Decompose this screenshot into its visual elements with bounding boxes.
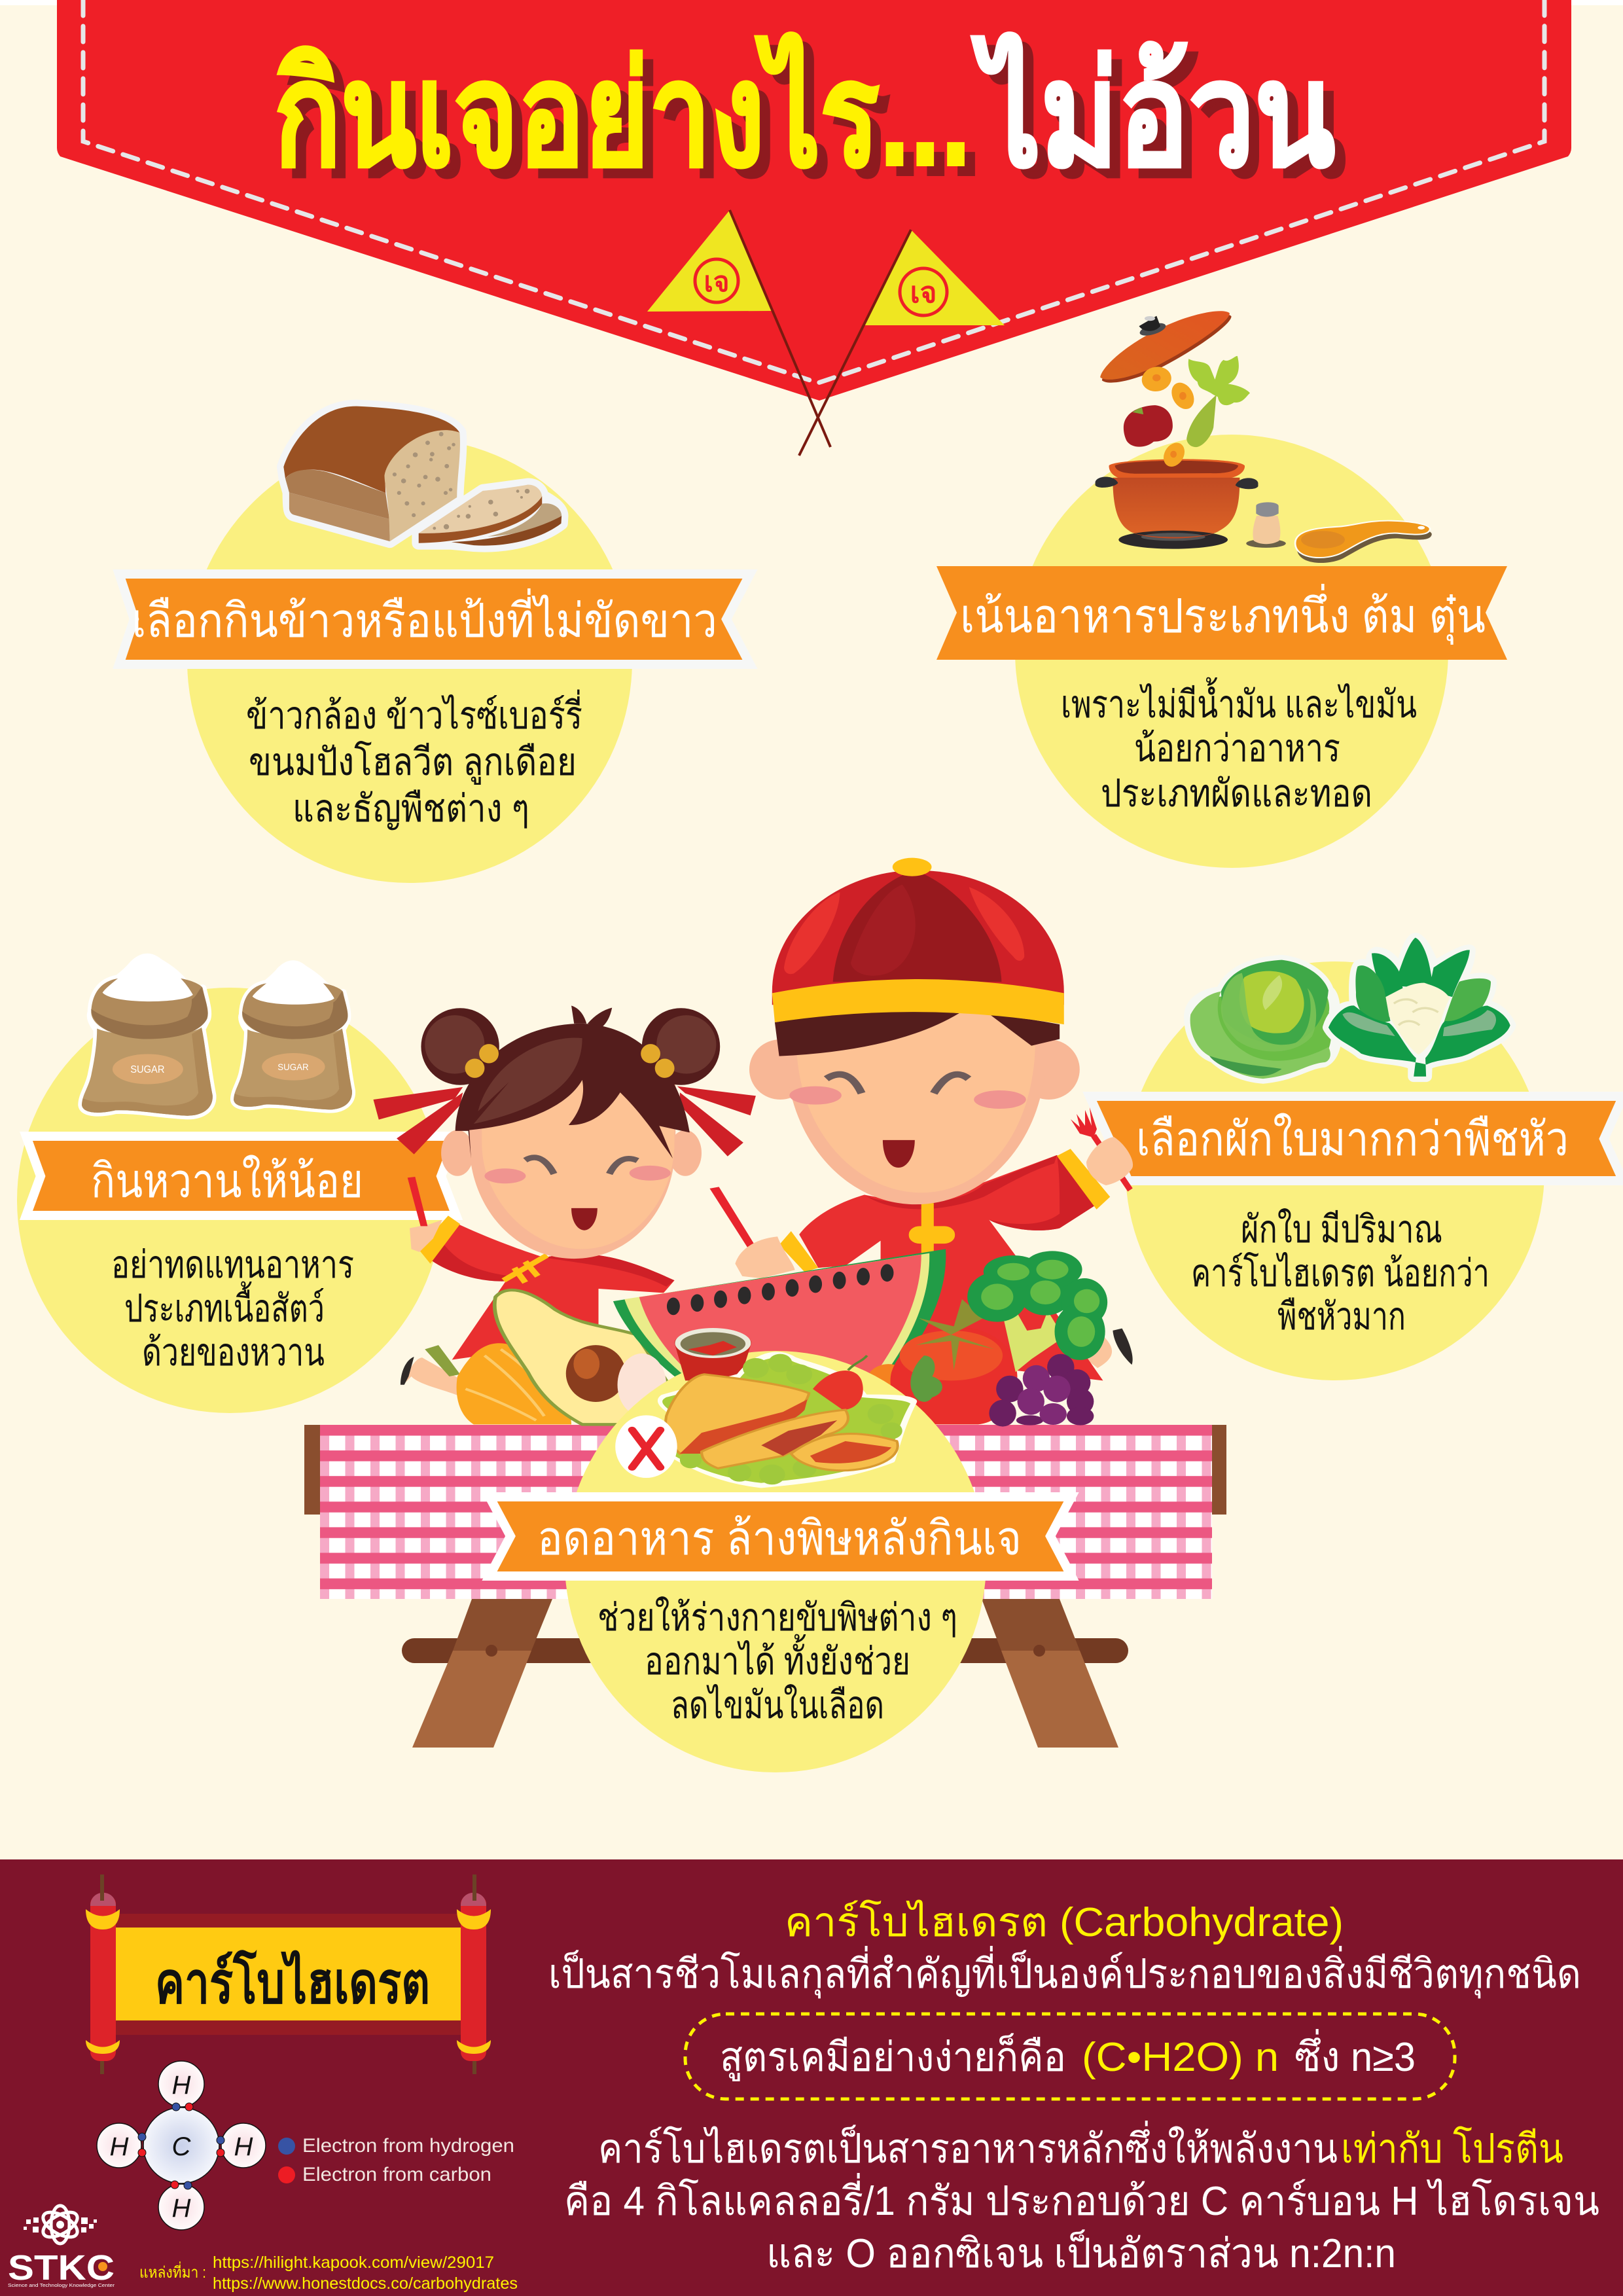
text block: sources: แหล่งที่มา : <box>139 2261 206 2282</box>
icon: scroll heading: คาร์โบไฮเดรต <box>155 1950 430 2015</box>
icon: crossed flags: เจ <box>910 277 936 309</box>
text block: energy facts: เท่ากับ โปรตีน <box>1341 2126 1563 2172</box>
text block: fasting: ออกมาได้ ทั้งยังช่วย <box>645 1634 910 1683</box>
chart: methane molecule diagram: C <box>172 2132 192 2161</box>
panel: carbohydrate facts footer <box>0 1859 1623 2296</box>
panel: fasting after vegetarian festival circle <box>565 1351 986 1772</box>
callout: chemical formula: ซึ่ง n≥3 <box>1294 2029 1416 2080</box>
text block: steamed food: ประเภทผัดและทอด <box>1101 772 1372 815</box>
title: ไม่อ้วน <box>982 42 1346 206</box>
title: ไม่อ้วน <box>971 32 1335 196</box>
text block: sources: https://www.honestdocs.co/carbohydrates <box>213 2274 518 2293</box>
legend: electron sources: Electron from hydrogen <box>302 2135 514 2157</box>
legend: electron sources <box>278 2135 514 2185</box>
text block: steamed food <box>1061 677 1417 815</box>
icon: chilli cup <box>675 1328 751 1380</box>
panel: picnic table <box>304 1425 1226 1748</box>
text block: energy facts: คาร์โบไฮเดรตเป็นสารอาหารหลักซึ่งให้พลังงาน <box>598 2121 1338 2172</box>
heading ribbon: whole grain: เลือกกินข้าวหรือแป้งที่ไม่ขัดขาว <box>132 588 717 647</box>
icon: STKC logo <box>8 2206 115 2288</box>
icon: squash and avocado <box>425 1290 675 1424</box>
icon: prohibited X <box>615 1415 677 1478</box>
text block: whole grain <box>246 689 582 830</box>
chart: methane molecule diagram: H <box>234 2132 253 2161</box>
icon: bread loaf <box>283 406 562 546</box>
icon: cabbage <box>1189 960 1337 1079</box>
heading ribbon: leafy vegetables <box>1090 1096 1623 1181</box>
chart: methane molecule diagram: H <box>172 2071 191 2100</box>
callout: chemical formula <box>685 2014 1455 2099</box>
icon: sugar sack right: SUGAR <box>277 1062 309 1072</box>
text block: sources <box>139 2253 518 2293</box>
heading ribbon: less sugar <box>26 1136 456 1215</box>
text block: fasting: ช่วยให้ร่างกายขับพิษต่าง ๆ <box>597 1596 957 1639</box>
table leg left <box>412 1599 552 1748</box>
heading ribbon: less sugar: กินหวานให้น้อย <box>91 1155 363 1208</box>
heading ribbon: fasting: อดอาหาร ล้างพิษหลังกินเจ <box>537 1513 1022 1565</box>
icon: STKC logo: Science and Technology Knowledge Center <box>8 2284 115 2288</box>
icon: tacos <box>662 1354 913 1485</box>
chart: methane molecule diagram <box>97 2061 266 2230</box>
icon: sugar sack left: SUGAR <box>130 1064 164 1075</box>
table post right <box>1212 1425 1226 1515</box>
gingham tablecloth <box>320 1425 1212 1599</box>
icon: tomato and carrot <box>870 1299 1017 1424</box>
callout: chemical formula: สูตรเคมีอย่างง่ายก็คือ <box>720 2033 1066 2081</box>
icon: scroll heading <box>86 1874 491 2074</box>
panel: steamed food circle <box>1015 435 1448 868</box>
title: กินเจอย่างไร... <box>274 32 971 196</box>
text block: energy facts: และ O ออกซิเจน เป็นอัตราส่วน n:2n:n <box>766 2229 1396 2276</box>
text block: energy facts <box>564 2121 1599 2276</box>
text block: leafy vegetables: พืชหัวมาก <box>1277 1295 1406 1338</box>
icon: broccoli <box>967 1251 1107 1372</box>
heading ribbon: leafy vegetables: เลือกผักใบมากกว่าพืชหัว <box>1136 1113 1569 1166</box>
text block: less sugar: ด้วยของหวาน <box>142 1331 325 1374</box>
icon: boy <box>709 858 1133 1380</box>
crossbar <box>402 1638 1128 1663</box>
heading ribbon: whole grain <box>119 574 750 664</box>
text block: whole grain: ข้าวกล้อง ข้าวไรซ์เบอร์รี่ <box>246 689 582 737</box>
chart: methane molecule diagram: H <box>172 2194 191 2223</box>
icon: crossed flags: เจ <box>704 266 729 297</box>
panel: red title banner <box>57 0 1571 401</box>
text block: less sugar: ประเภทเนื้อสัตว์ <box>124 1282 325 1330</box>
text block: leafy vegetables: ผักใบ มีปริมาณ <box>1241 1208 1442 1251</box>
legend: electron sources: Electron from carbon <box>302 2164 491 2185</box>
text block: leafy vegetables: คาร์โบไฮเดรต น้อยกว่า <box>1191 1251 1489 1295</box>
text block: steamed food: น้อยกว่าอาหาร <box>1134 727 1340 770</box>
icon: watermelon slice <box>613 1249 946 1416</box>
icon: girl <box>373 1005 756 1395</box>
table leg right <box>982 1599 1118 1748</box>
text block: less sugar: อย่าทดแทนอาหาร <box>111 1244 354 1286</box>
panel: leafy vegetable circle <box>1126 961 1544 1380</box>
icon: grapes <box>989 1354 1094 1427</box>
text block: whole grain: ขนมปังโฮลวีต ลูกเดือย <box>249 740 577 785</box>
text block: less sugar <box>111 1244 354 1374</box>
text block: fasting: ลดไขมันในเลือด <box>671 1683 884 1727</box>
text block: whole grain: และธัญพืชต่าง ๆ <box>293 787 529 830</box>
heading ribbon: steamed food: เน้นอาหารประเภทนึ่ง ต้ม ตุ๋น <box>960 584 1486 645</box>
icon: sugar sack left <box>82 957 213 1116</box>
heading ribbon: fasting <box>490 1497 1071 1576</box>
title: กินเจอย่างไร... <box>285 42 982 206</box>
icon: STKC logo: STKC <box>8 2248 115 2287</box>
icon: sugar sack right <box>234 963 352 1109</box>
text block: sources: https://hilight.kapook.com/view/29017 <box>213 2253 494 2272</box>
heading ribbon: steamed food <box>936 566 1507 660</box>
icon: cooking pot with falling vegetables <box>1096 311 1432 563</box>
title <box>274 32 1346 206</box>
icon: crossed flags <box>647 210 1005 456</box>
heading: carbohydrate definition: คาร์โบไฮเดรต (Carbohydrate) <box>785 1899 1344 1945</box>
panel: less sugar circle <box>17 988 442 1413</box>
icon: boy's fork and hand <box>1071 1107 1133 1190</box>
callout: chemical formula: (C•H2O) n <box>1082 2035 1279 2080</box>
text block: fasting <box>597 1596 957 1727</box>
icon: cauliflower <box>1329 938 1510 1077</box>
text block: steamed food: เพราะไม่มีน้ำมัน และไขมัน <box>1061 677 1417 726</box>
panel: whole grain circle <box>187 438 632 883</box>
text block: leafy vegetables <box>1191 1208 1489 1338</box>
table post left <box>304 1425 320 1515</box>
chart: methane molecule diagram: H <box>110 2132 129 2161</box>
